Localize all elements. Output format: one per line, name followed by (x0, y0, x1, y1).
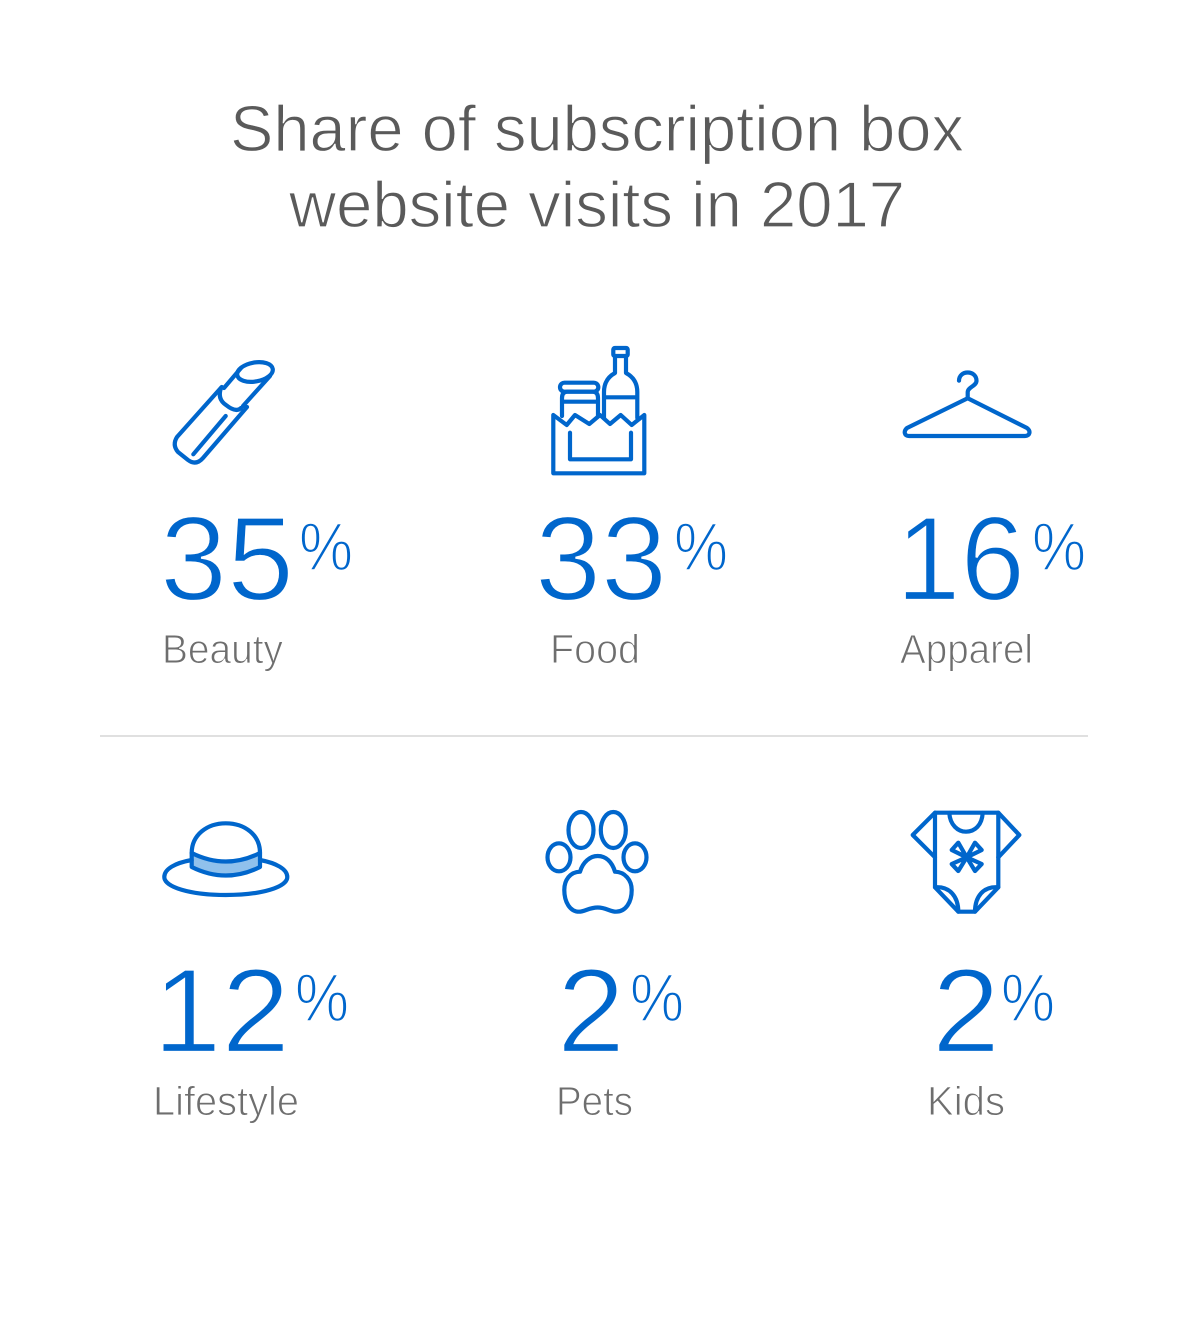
icon: onesie (913, 813, 1019, 912)
panel: pets (548, 812, 684, 1124)
icon: lipstick (175, 360, 274, 463)
value: 12%: 12 (153, 944, 290, 1078)
value: 2% (557, 944, 684, 1078)
icon: hanger (905, 372, 1029, 436)
value: 2%: 2 (932, 944, 1000, 1078)
label: Apparel: Apparel (900, 626, 1033, 672)
label: Pets: Pets (556, 1078, 633, 1124)
icon: hat (164, 823, 287, 895)
value: 16%: 16 (896, 492, 1025, 626)
value: 35% (160, 492, 353, 626)
panel: kids (913, 813, 1055, 1124)
title: website visits in 2017 (288, 168, 905, 241)
title: Share of subscription box (230, 92, 964, 165)
label: Lifestyle: Lifestyle (153, 1078, 299, 1124)
panel: food (535, 348, 728, 672)
value: 12%: % (295, 960, 349, 1036)
value: 35%: % (299, 509, 353, 585)
label: Kids: Kids (927, 1078, 1005, 1124)
icon: paw (548, 812, 646, 912)
label: Beauty: Beauty (162, 626, 283, 672)
title (230, 92, 964, 241)
value: 33%: 33 (535, 492, 667, 626)
label: Food: Food (550, 626, 640, 672)
value: 2%: % (1001, 960, 1055, 1036)
value: 2% (932, 944, 1055, 1078)
panel: beauty (160, 360, 353, 672)
panel: apparel (896, 372, 1086, 672)
value: 35%: 35 (160, 492, 294, 626)
panel: lifestyle (153, 823, 349, 1124)
value: 12% (153, 944, 349, 1078)
value: 16%: % (1032, 509, 1086, 585)
value: 2%: 2 (557, 944, 625, 1078)
icon: grocery bag (553, 348, 644, 473)
value: 33%: % (674, 509, 728, 585)
value: 2%: % (630, 960, 684, 1036)
value: 33% (535, 492, 728, 626)
